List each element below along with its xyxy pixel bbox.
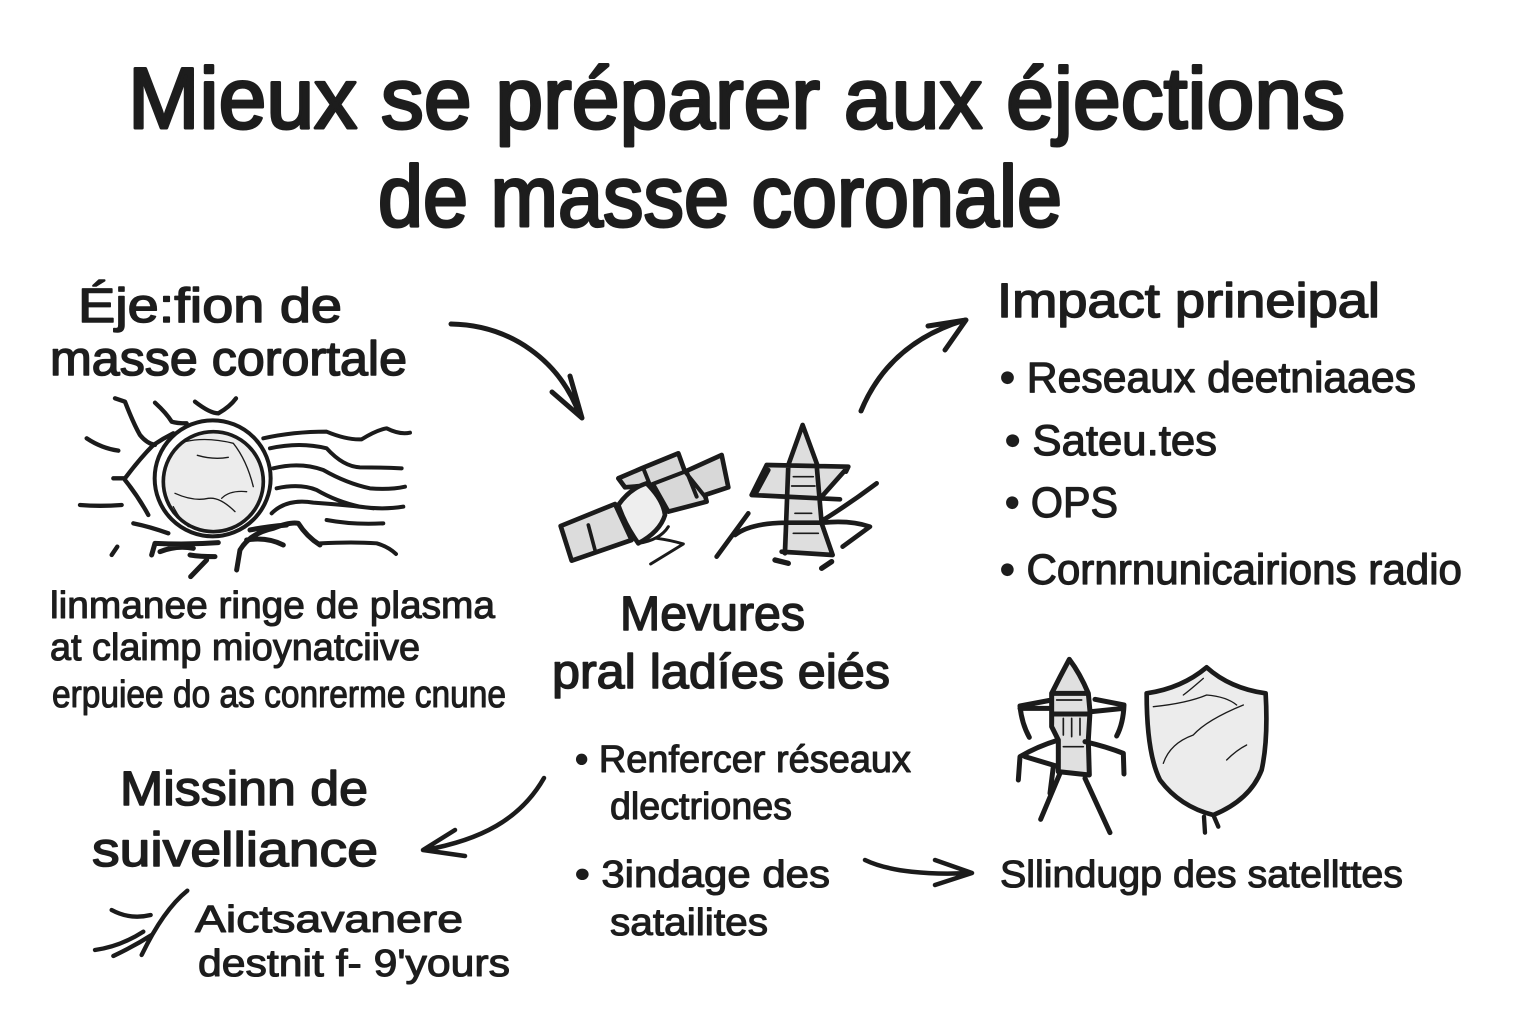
heading: mesures: Mevures: [620, 588, 805, 641]
text block: description of the ejection: erpuiee do as conrerme cnune: [52, 674, 506, 716]
list: impacts: • Sateu.tes: [1005, 417, 1217, 465]
text block: description of the ejection: [50, 585, 506, 716]
heading: mission de surveillance: [92, 763, 378, 877]
list: measures: [575, 739, 911, 944]
heading: éjection de masse coronale: Éje:fion de: [78, 280, 342, 333]
list: measures: dlectriones: [610, 786, 792, 828]
heading: impact principal: Impact prineipal: [997, 275, 1380, 328]
list: impacts: • Reseaux deetniaaes: [1000, 354, 1416, 402]
text block: advance warning: Aictsavanere: [195, 899, 463, 941]
arrow: pylon to main impact: [861, 320, 966, 411]
text block: description of the ejection: at claimp mioynatciive: [50, 627, 420, 669]
caption: shielding satellites: Sllindugp des satellttes: [1000, 854, 1403, 896]
heading: mesures: pral ladíes eiés: [552, 646, 890, 699]
icon: satellite: [561, 453, 728, 564]
list: measures: satailites: [610, 902, 768, 944]
text block: advance warning: destnit f- 9'yours: [198, 943, 510, 985]
arrow: measures to surveillance: [423, 778, 544, 856]
arrow: ejection to measures: [451, 324, 582, 418]
heading: mesures: [552, 588, 890, 699]
icon: satellite rocket: [1018, 659, 1124, 833]
list: impacts: • OPS: [1005, 479, 1118, 527]
heading: mission de surveillance: Missinn de: [120, 763, 368, 816]
icon: shield: [1147, 667, 1266, 833]
title: de masse coronale: [378, 149, 1062, 245]
list: measures: • 3indage des: [575, 854, 830, 896]
list: impacts: [1000, 354, 1462, 594]
heading: mission de surveillance: suivelliance: [92, 824, 378, 877]
text block: advance warning: [195, 899, 510, 985]
heading: éjection de masse coronale: masse corortale: [50, 333, 407, 386]
title: [128, 51, 1345, 245]
list: impacts: • Cornrnunicairions radio: [1000, 546, 1462, 594]
heading: éjection de masse coronale: [50, 280, 407, 386]
icon: small comet streak: [95, 891, 187, 956]
list: measures: • Renfercer réseaux: [575, 739, 911, 781]
icon: power pylon: [717, 425, 877, 568]
text block: description of the ejection: linmanee ringe de plasma: [50, 585, 496, 627]
icon: sun with plasma ejection: [80, 398, 410, 577]
title: Mieux se préparer aux éjections: [128, 51, 1345, 147]
arrow: shielding to satellites: [865, 860, 972, 885]
